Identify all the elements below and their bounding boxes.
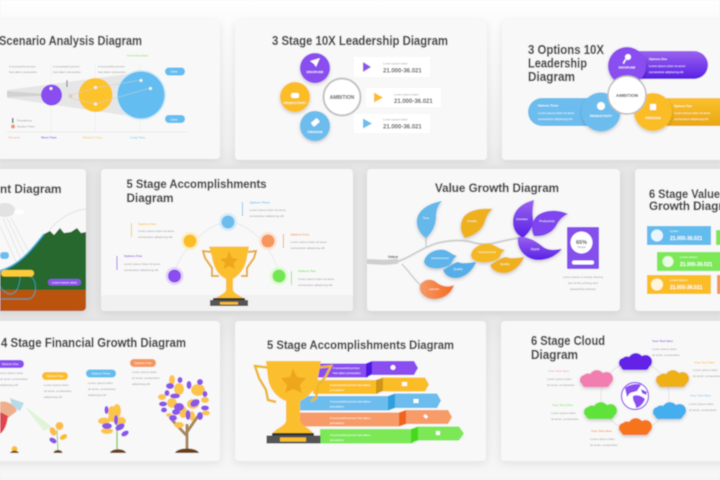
heading: 4 Stage Financial Growth Diagram — [1, 336, 186, 350]
label upper left: Your Text Here — [548, 369, 569, 373]
option four text: Options Four — [290, 232, 310, 236]
heading — [531, 334, 605, 362]
cone chart — [7, 65, 187, 132]
option pills: Options Three — [538, 104, 559, 108]
panel: 5 Stage Accomplishments ribbons — [235, 321, 486, 461]
option two text: Lorem ipsum dolor sit amet — [298, 277, 334, 281]
ambition hub — [608, 76, 646, 114]
option pills: Options Three — [92, 372, 111, 376]
legend: Decline Point — [17, 124, 35, 128]
landscape illustration — [0, 203, 86, 311]
stage cards: 21.000-36.021 — [670, 285, 702, 291]
option three text — [242, 200, 286, 218]
option pills: Lorem ipsum dolor sit amet — [649, 64, 685, 68]
young plant stage — [98, 404, 130, 453]
option five text: Lorem ipsum dolor sit amet — [124, 262, 160, 266]
label bottom: Your Text Here — [591, 429, 612, 433]
callouts — [165, 68, 185, 123]
timeline labels — [8, 136, 145, 140]
label top: sit amet, consectetur — [652, 353, 680, 357]
panel: 4 Stage Financial Growth — [0, 321, 220, 461]
text blocks: has taken precaution — [53, 70, 81, 74]
value cards: 21.000-36.021 — [383, 124, 422, 130]
option three text: consectetur adipiscing elit — [250, 214, 284, 218]
option pills — [0, 359, 156, 380]
option text: sit amet, consectetur — [44, 389, 72, 393]
option pills: Options Four — [134, 361, 152, 365]
option text: Lorem ipsum dolor — [132, 370, 157, 374]
option one text — [131, 222, 174, 239]
option one text: Options One — [138, 222, 156, 226]
heading: Diagram — [528, 70, 575, 84]
callouts: Case — [170, 118, 178, 122]
timeline labels: Present — [8, 136, 20, 140]
label upper right: Your Text Here — [694, 360, 715, 364]
text blocks: A successful person — [53, 64, 80, 68]
option text: adipiscing elit — [132, 382, 150, 386]
value cards — [354, 57, 441, 133]
heading: scenario analysis: Scenario Analysis Diagram — [0, 33, 142, 48]
heading: nt Diagram — [0, 182, 62, 196]
option three text: Lorem ipsum dolor sit amet — [250, 208, 286, 212]
value cards: Lorem ipsum dolor — [383, 62, 408, 66]
option text: adipiscing elit — [88, 393, 106, 397]
option pills: Options One — [2, 362, 19, 366]
option one text: consectetur adipiscing elit — [138, 235, 173, 239]
blue leaves: Improvement — [431, 256, 449, 260]
option circles: PRODUCTIVITY — [590, 114, 612, 118]
purple ribbon: A successful person — [333, 366, 360, 370]
panel: 6 Stage Value Growth — [635, 169, 720, 311]
blue ribbon: precaution — [330, 404, 344, 408]
label lower right — [689, 394, 717, 412]
label value: Value — [388, 254, 399, 259]
orange ribbon: precaution — [330, 421, 344, 425]
option four text: consectetur adipiscing elit — [290, 246, 325, 250]
label upper right — [693, 360, 720, 378]
purple leaves — [513, 200, 568, 260]
stage circles — [280, 53, 330, 141]
text blocks: has taken precaution — [98, 70, 126, 74]
yellow ribbon — [313, 378, 429, 394]
label upper left: sit amet, consectetur — [547, 383, 575, 387]
legend — [11, 118, 35, 128]
label lower left: Your Text Here — [552, 403, 573, 407]
blue leaves: Time — [423, 216, 430, 220]
label lower left — [551, 403, 579, 421]
yellow leaves: Growth — [467, 219, 477, 223]
heading — [528, 43, 605, 84]
label bottom: Lorem ipsum dolor — [590, 437, 615, 441]
value cards: 21.000-36.021 — [394, 99, 433, 105]
option pills: Lorem ipsum dolor sit amet — [674, 111, 710, 115]
panel: 5 Stage Accomplishments arc — [101, 169, 353, 311]
caption: Lorem ipsum is simply dummy — [563, 275, 604, 279]
panel: Value Growth Diagram — [367, 169, 620, 311]
option pills: Options Two — [47, 374, 64, 378]
panel: 6 Stage Cloud Diagram — [501, 321, 720, 461]
panel: Scenario Analysis Diagram — [0, 20, 220, 159]
label: good scenario: Good Scenario — [127, 54, 149, 58]
option two text: consectetur adipiscing elit — [298, 283, 333, 287]
option two text — [291, 269, 334, 287]
label lower right: sit amet, consectetur — [689, 408, 717, 412]
heading: 5 Stage Accomplishments — [126, 177, 267, 191]
tree stage — [158, 375, 210, 453]
purple ribbon: has taken precaution — [333, 371, 361, 375]
callouts: Case — [170, 70, 178, 74]
timeline labels: Medium Time — [83, 136, 102, 140]
ambition hub: AMBITION — [330, 95, 355, 101]
green ribbon: precaution — [330, 438, 344, 442]
panel: 3 Options 10X Leadership — [502, 20, 720, 160]
label bottom — [590, 429, 618, 447]
stage circles: PRODUCTIVITY — [284, 101, 306, 105]
option text: sit amet, consectetur — [132, 376, 160, 380]
heading: 3 Options 10X — [528, 43, 605, 57]
option five text: consectetur adipiscing elit — [124, 268, 159, 272]
heading: 5 Stage Accomplishments Diagram — [267, 338, 454, 352]
option text: Lorem ipsum dolor — [88, 381, 113, 385]
yellow ribbon: A successful person has taken — [330, 383, 371, 387]
purple ribbon — [318, 361, 418, 378]
stage circles: DISCIPLINE — [307, 70, 323, 74]
option circles: FREEDOM — [646, 116, 661, 120]
value cards: 21.000-36.021 — [383, 68, 422, 74]
blue leaves: Quality — [453, 267, 463, 271]
stage cards — [647, 226, 720, 294]
percentage card — [567, 227, 599, 269]
ambition hub: AMBITION — [616, 93, 638, 98]
stage cards: Lorem ipsum — [680, 255, 698, 259]
text blocks: A successful person — [9, 64, 36, 68]
panel: Development Diagram — [0, 169, 86, 311]
purple leaves: Productivity — [539, 219, 555, 223]
option four text: Lorem ipsum dolor sit amet — [290, 240, 327, 244]
heading: Leadership — [528, 56, 587, 70]
heading: 3 Stage 10X Leadership Diagram — [272, 34, 448, 48]
option one text: Lorem ipsum dolor sit amet — [138, 229, 174, 233]
option five text — [116, 254, 160, 272]
heading: Diagram — [531, 348, 578, 362]
option text: adipiscing elit — [44, 395, 62, 399]
caption — [563, 275, 604, 291]
value cards: Lorem ipsum dolor — [394, 92, 419, 96]
legend: Prevalence — [17, 118, 32, 122]
text blocks: has taken precaution — [9, 70, 37, 74]
orange ribbon: A successful person has taken — [330, 416, 371, 420]
heading: 6 Stage Cloud — [531, 334, 605, 348]
label top: Lorem ipsum dolor — [652, 347, 677, 351]
option circles — [582, 47, 672, 132]
option text: sit amet, consectetur — [0, 377, 28, 381]
label top: Your Text Here — [652, 339, 673, 343]
orange leaf: Launch — [429, 287, 439, 291]
stage cards: 21.000-36.021 — [680, 262, 712, 268]
heading — [126, 177, 267, 205]
branch stem — [367, 232, 520, 288]
percentage card: 65% — [576, 240, 587, 246]
ambition hub — [324, 78, 360, 116]
option five text: Options Five — [124, 254, 142, 258]
yellow leaves — [461, 209, 524, 273]
stage cards: Lorem — [670, 229, 679, 233]
text blocks — [9, 64, 126, 74]
option pills: Options Two — [674, 104, 692, 108]
label top — [652, 339, 680, 357]
caption: text of the printing and — [568, 281, 598, 285]
label upper left: Lorem ipsum dolor — [547, 377, 572, 381]
option pills: consectetur adipiscing elit — [674, 117, 709, 121]
blue ribbon — [298, 394, 441, 410]
sprout stage — [48, 422, 68, 453]
purple leaves: Digital — [531, 247, 539, 251]
label lower left: Lorem ipsum dolor — [551, 411, 576, 415]
option four text — [283, 232, 327, 250]
heading — [649, 187, 720, 213]
label upper left — [547, 369, 575, 387]
panel: 3 Stage 10X Leadership — [235, 20, 487, 160]
orange ribbon — [298, 410, 452, 426]
heading: Diagram — [126, 191, 174, 205]
green ribbon: A successful person has taken — [330, 433, 371, 437]
option pills: consectetur adipiscing elit — [649, 70, 684, 74]
option three text: Options Three — [250, 200, 270, 204]
label lower right: Your Text Here — [690, 394, 711, 398]
yellow leaves: Quality — [500, 262, 510, 266]
landscape illustration: Lorem ipsum dolor — [52, 280, 77, 284]
label upper right: Lorem ipsum dolor — [693, 368, 718, 372]
arc with stage circles — [166, 213, 288, 285]
cloud icons — [580, 353, 689, 435]
label upper right: sit amet, consectetur — [693, 374, 720, 378]
trophy — [255, 361, 331, 444]
label lower right: Lorem ipsum dolor — [689, 402, 714, 406]
percentage card: Sample — [577, 246, 586, 249]
timeline labels: Short Time — [41, 136, 57, 140]
option pills — [528, 51, 720, 126]
blue ribbon: A successful person has taken — [330, 400, 371, 404]
option pills: Options One — [649, 57, 667, 61]
option circles: DISCIPLINE — [619, 66, 635, 70]
trophy — [203, 246, 256, 306]
stage circles: FREEDOM — [308, 130, 323, 134]
green ribbon — [320, 426, 464, 444]
connector ring — [601, 362, 669, 430]
label bottom: sit amet, consectetur — [590, 443, 618, 447]
purple leaves: Increase — [516, 217, 528, 221]
yellow ribbon: precaution — [330, 388, 344, 392]
seed stage — [10, 446, 19, 453]
caption: typesetting industry — [570, 287, 596, 291]
label lower left: sit amet, consectetur — [551, 417, 579, 421]
blue leaves — [417, 201, 476, 278]
option text: adipiscing elit — [0, 383, 18, 387]
stage cards: Lorem ipsum — [670, 278, 688, 282]
option text: orem ipsum dolor — [0, 371, 23, 375]
stage cards: 21.000-36.021 — [670, 236, 702, 242]
option two text: Options Two — [298, 269, 316, 273]
option text — [0, 370, 160, 399]
option pills: Lorem ipsum dolor sit amet — [538, 111, 574, 115]
yellow leaves: Improvement — [478, 250, 496, 254]
timeline labels: Long Time — [130, 136, 145, 140]
option pills: consectetur adipiscing elit — [538, 117, 573, 121]
option text: Lorem ipsum dolor — [44, 383, 69, 387]
icon: globe — [622, 382, 648, 410]
value cards: Lorem ipsum dolor — [383, 118, 408, 122]
heading: Value Growth Diagram — [435, 181, 559, 195]
watering hand — [0, 398, 52, 434]
text blocks: A successful person — [98, 64, 125, 68]
option text: sit amet, consectetur — [88, 387, 116, 391]
orange leaf — [420, 280, 454, 299]
